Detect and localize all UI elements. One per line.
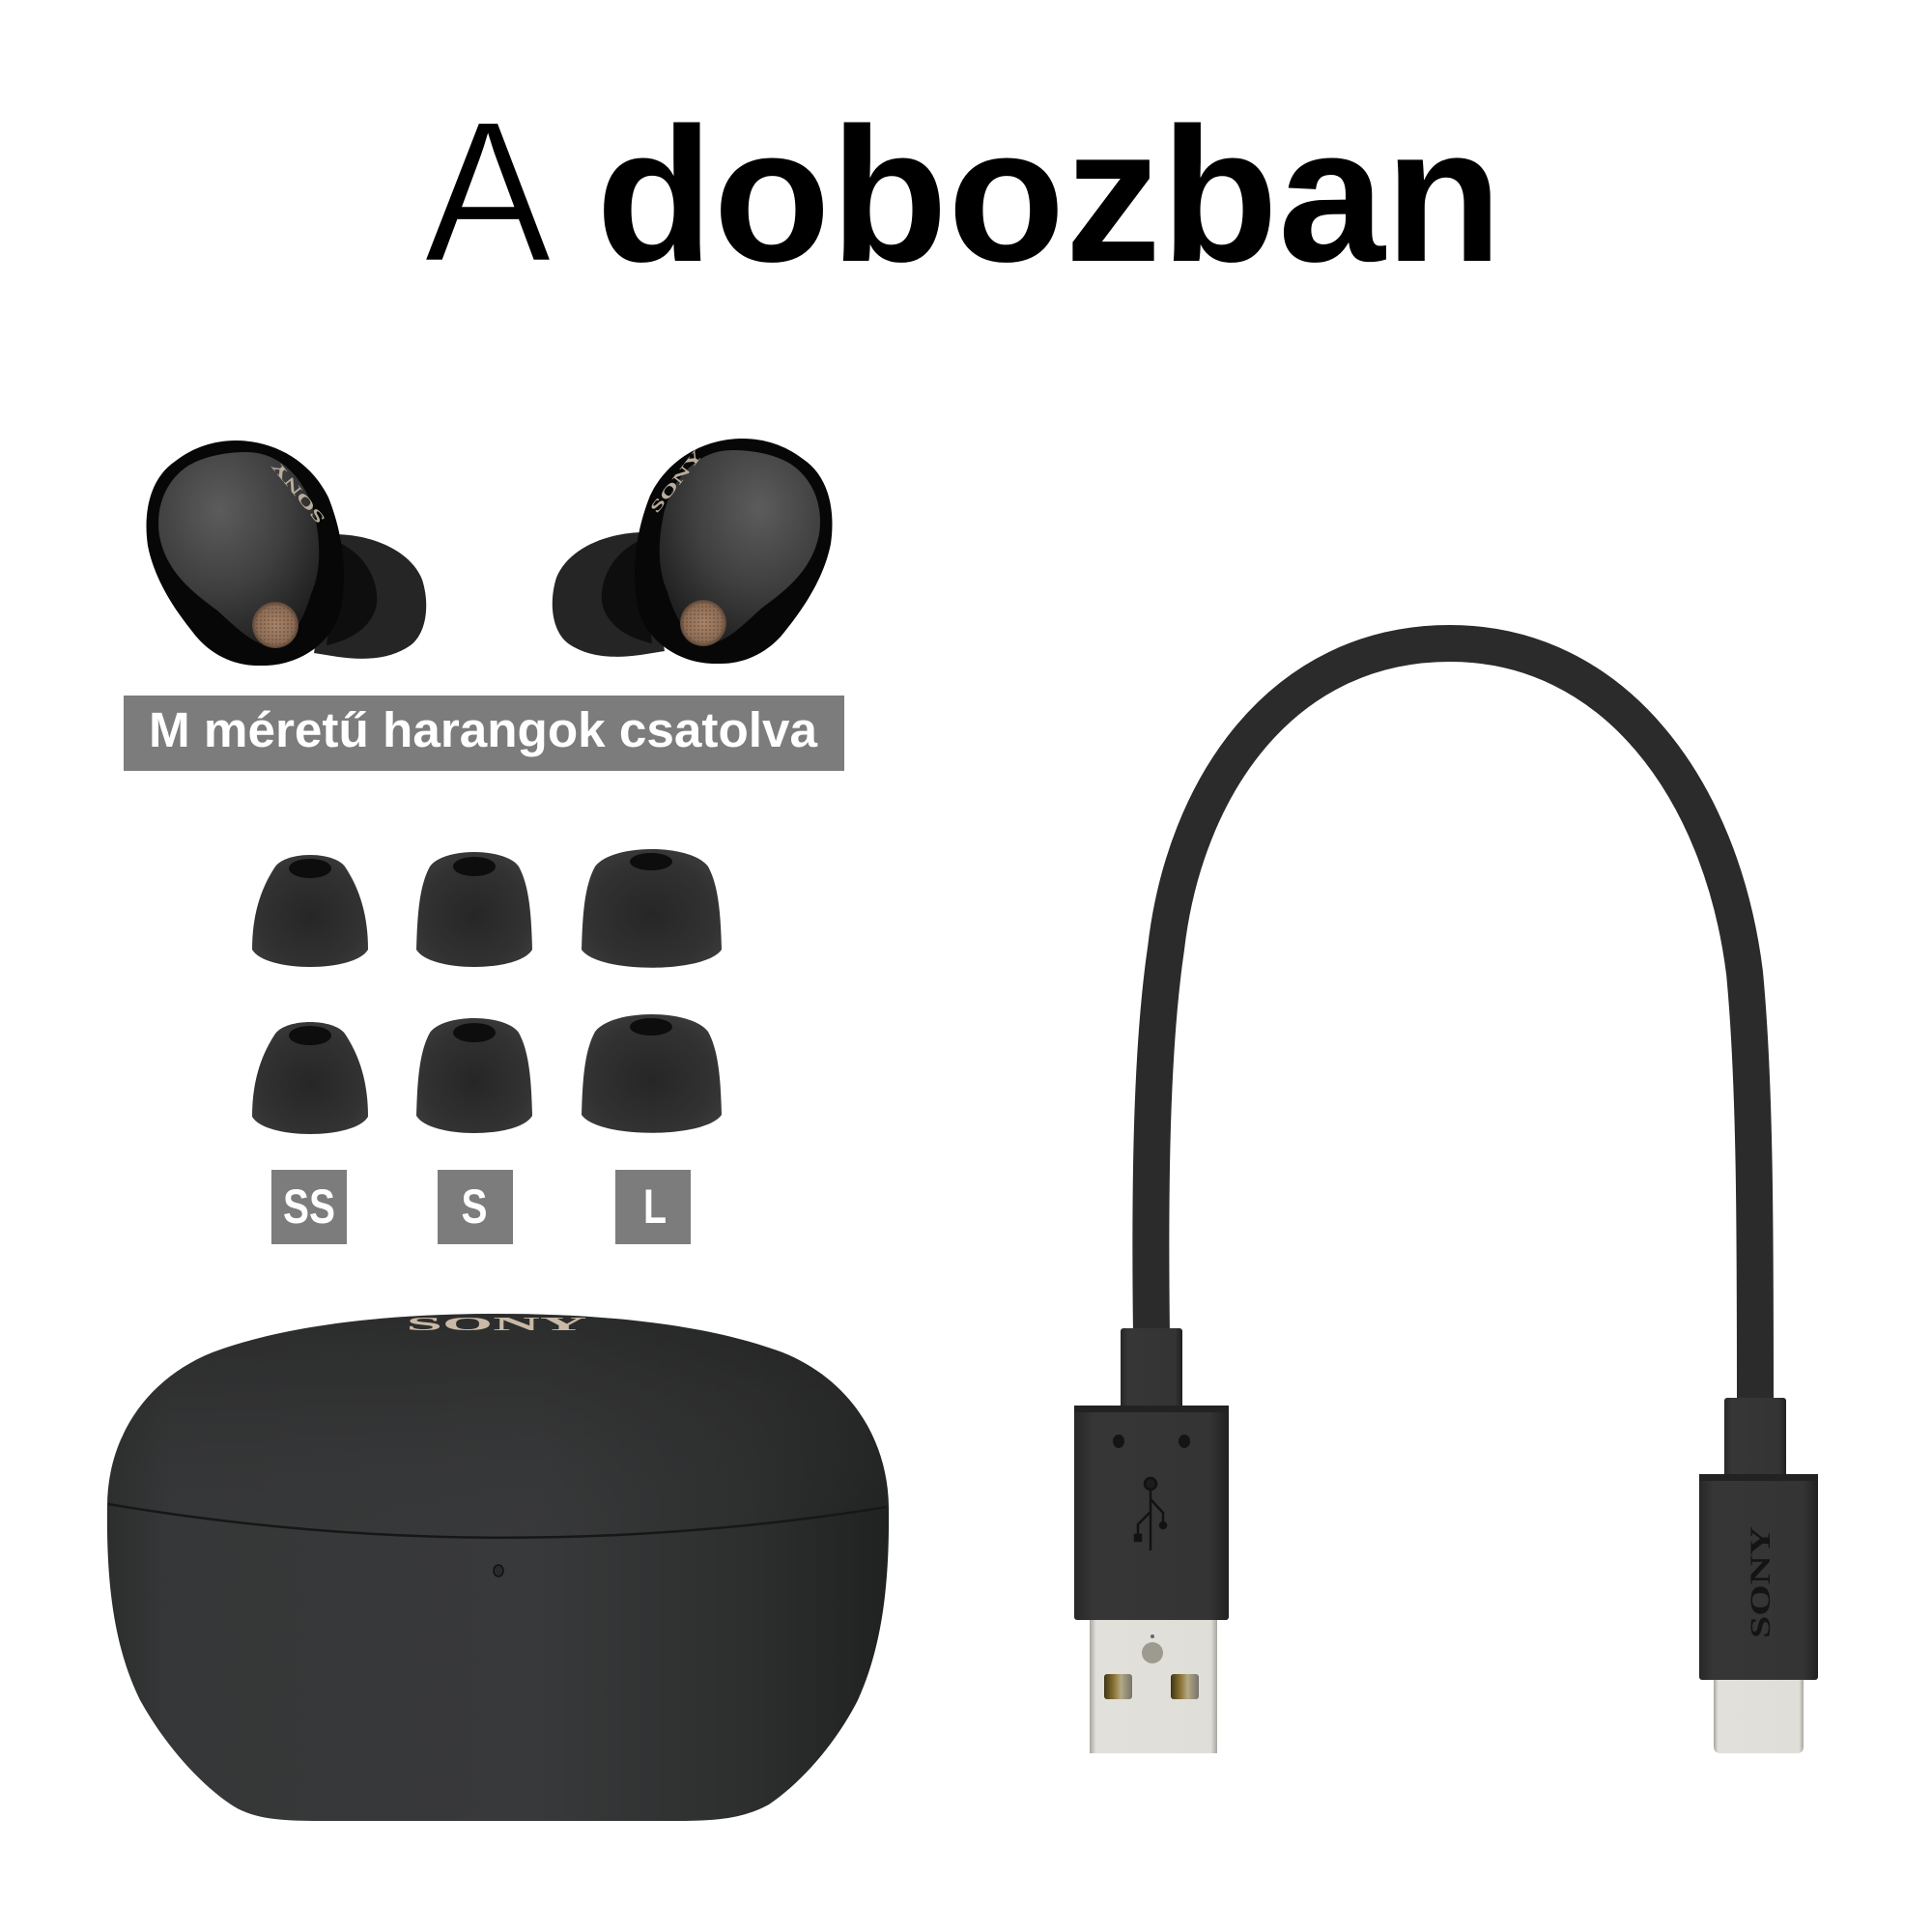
ear tip: S (416, 1018, 532, 1133)
ear tips: row 2 (252, 1014, 722, 1134)
logo: case: SONY (406, 1314, 588, 1335)
size label: L: L (643, 1179, 667, 1234)
title: A (424, 80, 552, 304)
label: M size tips attached (124, 696, 844, 771)
size label: S: S (462, 1179, 487, 1234)
cable wire (1151, 643, 1755, 1405)
USB-A connector (1074, 1328, 1229, 1753)
size label: SS (271, 1170, 347, 1244)
USB cable (1074, 643, 1818, 1753)
ear tips: row 1 (252, 849, 722, 968)
size label: L (615, 1170, 691, 1244)
ear tip: SS (252, 855, 368, 967)
logo: plug: SONY (1745, 1526, 1776, 1638)
ear tip: S (416, 852, 532, 967)
ear tip: SS (252, 1022, 368, 1134)
ear tip: L (582, 849, 722, 968)
logo: left bud: SONY (269, 458, 328, 526)
USB symbol (1135, 1478, 1166, 1550)
label: M size tips attached: M méretű harangok csatolva (149, 702, 818, 757)
charging case (107, 1314, 889, 1821)
USB-C connector (1699, 1398, 1818, 1753)
ear tip: L (582, 1014, 722, 1133)
indicator LED (494, 1565, 503, 1577)
size label: SS: SS (283, 1179, 335, 1234)
title: dobozban (596, 88, 1502, 301)
logo: right bud: SONY (648, 447, 706, 516)
icon: right earbud (553, 439, 832, 664)
icon: left earbud (147, 440, 426, 666)
size label: S (438, 1170, 513, 1244)
